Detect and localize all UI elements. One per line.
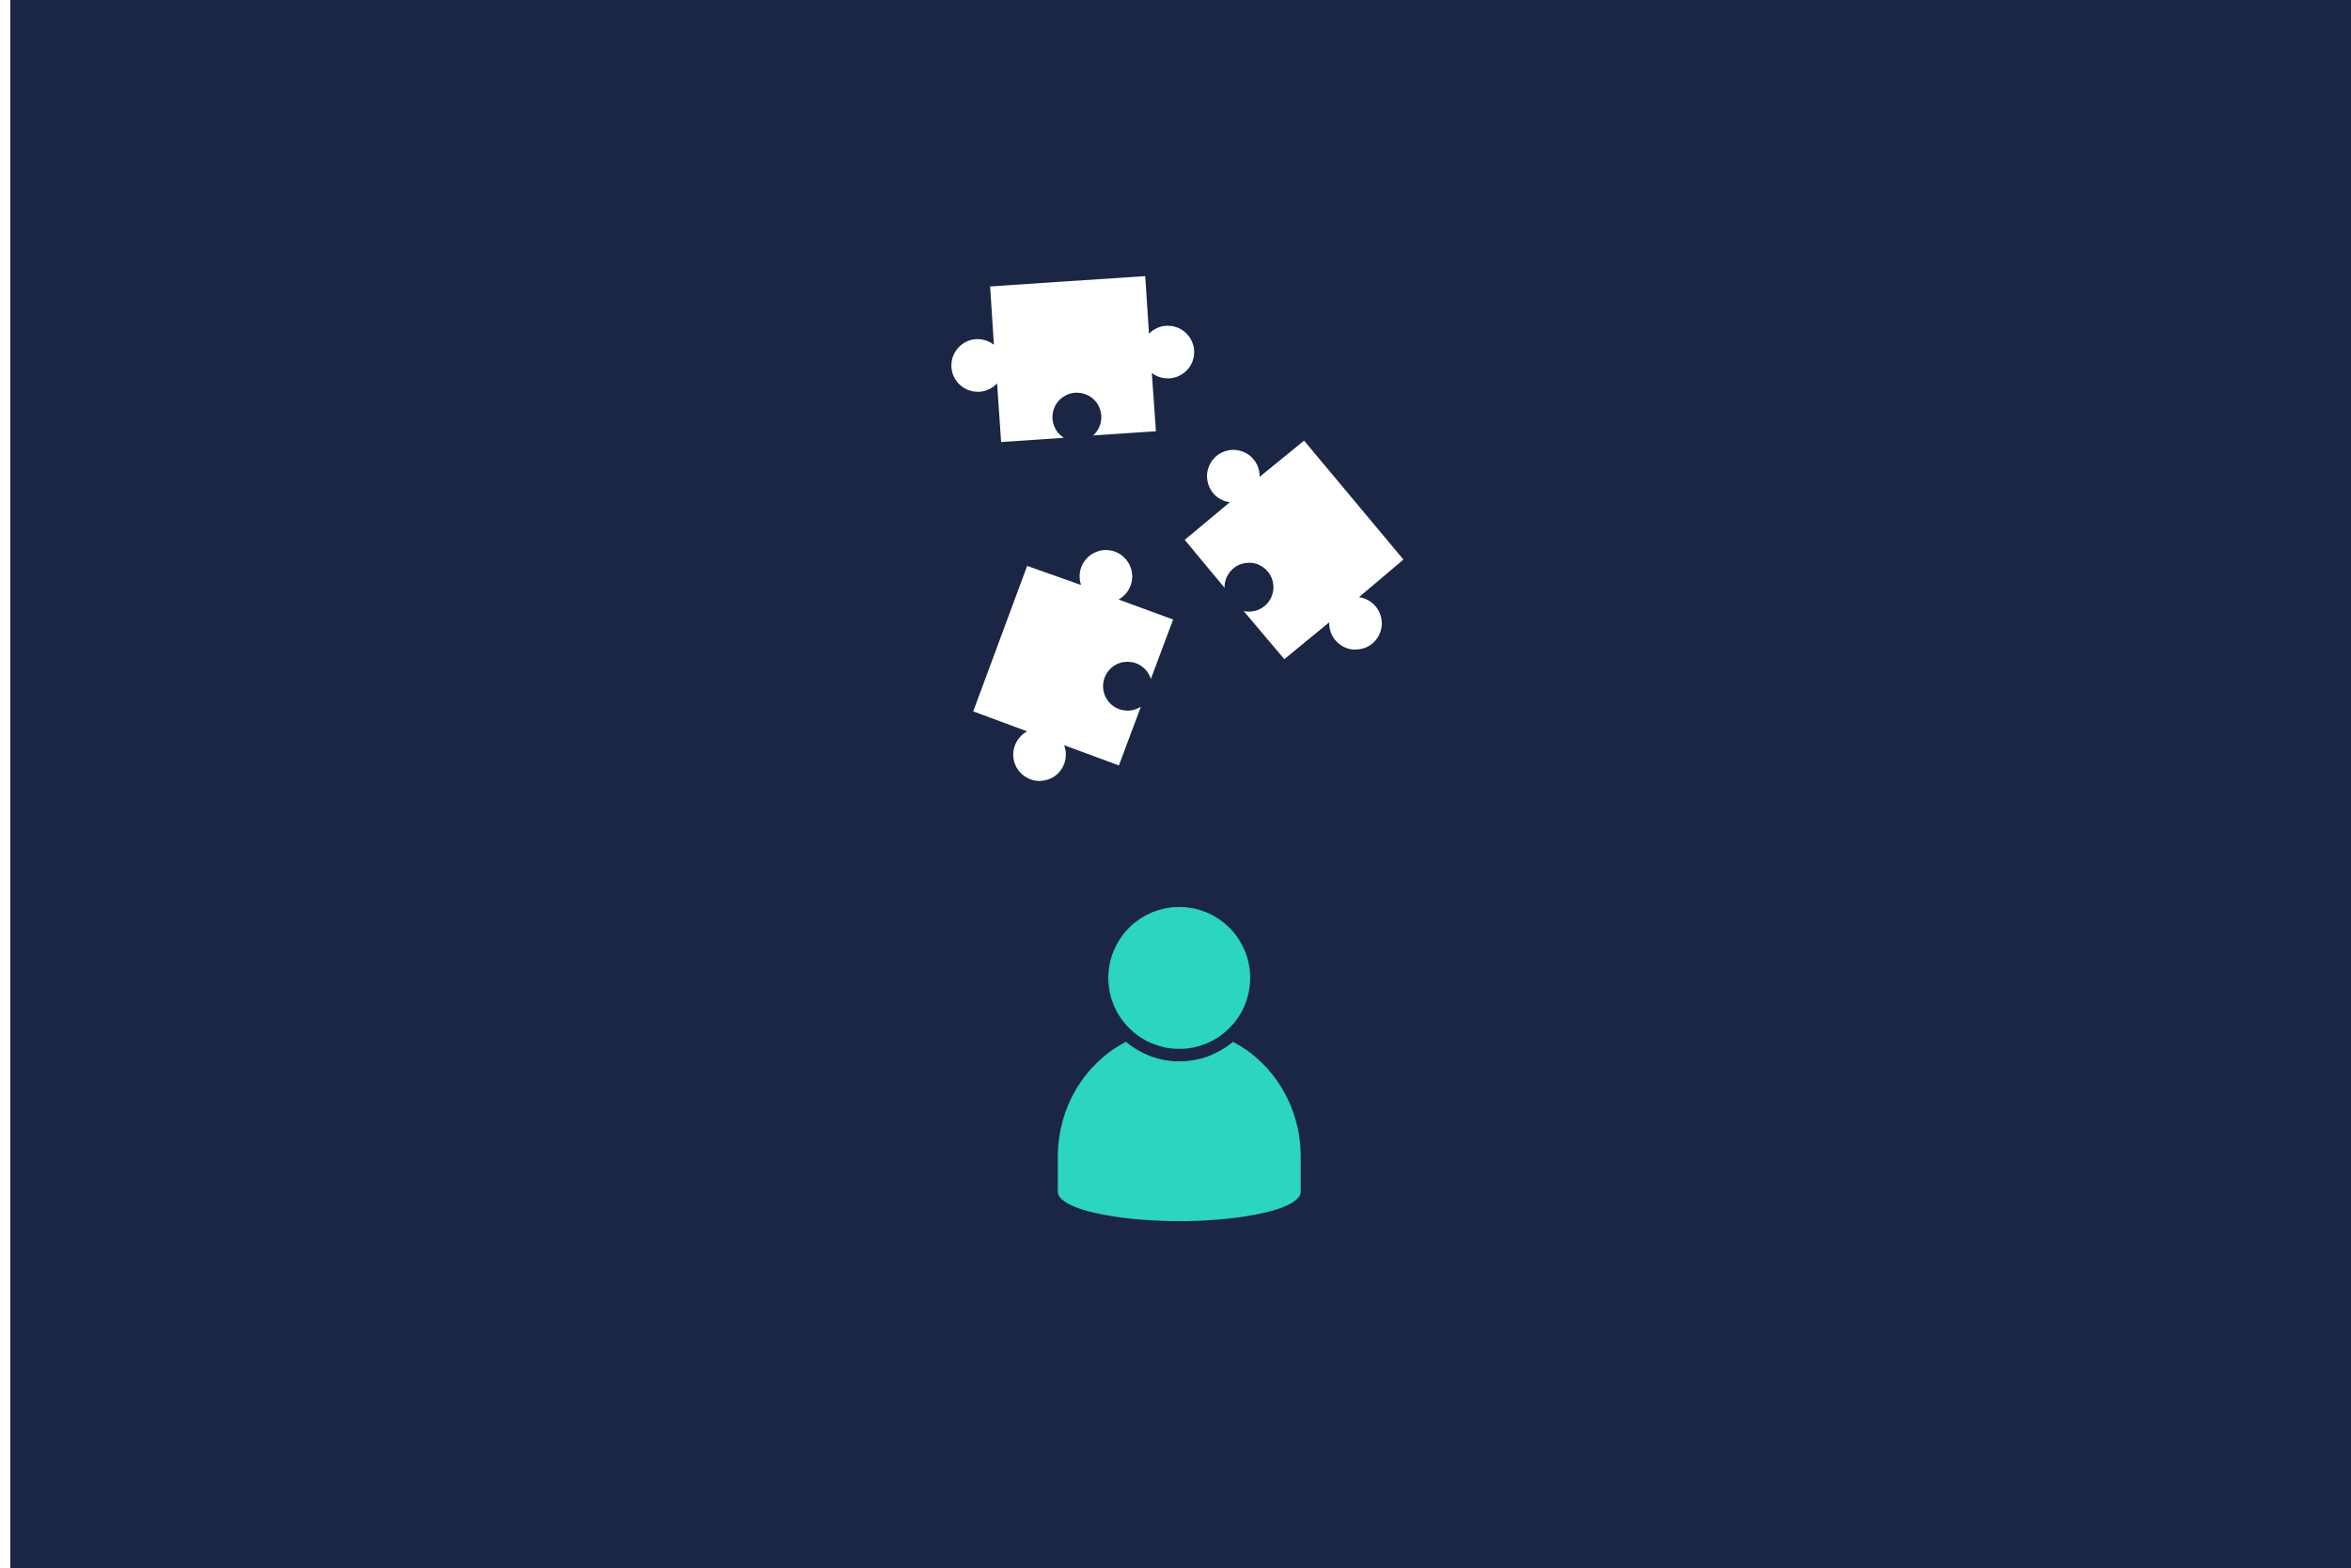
- person body: [1058, 1042, 1301, 1221]
- icon: puzzle piece bottom: [973, 550, 1173, 781]
- icon: person: [1058, 907, 1301, 1221]
- icon: puzzle piece top: [951, 276, 1194, 442]
- person head: [1108, 907, 1250, 1049]
- icon: puzzle piece right: [1184, 441, 1403, 659]
